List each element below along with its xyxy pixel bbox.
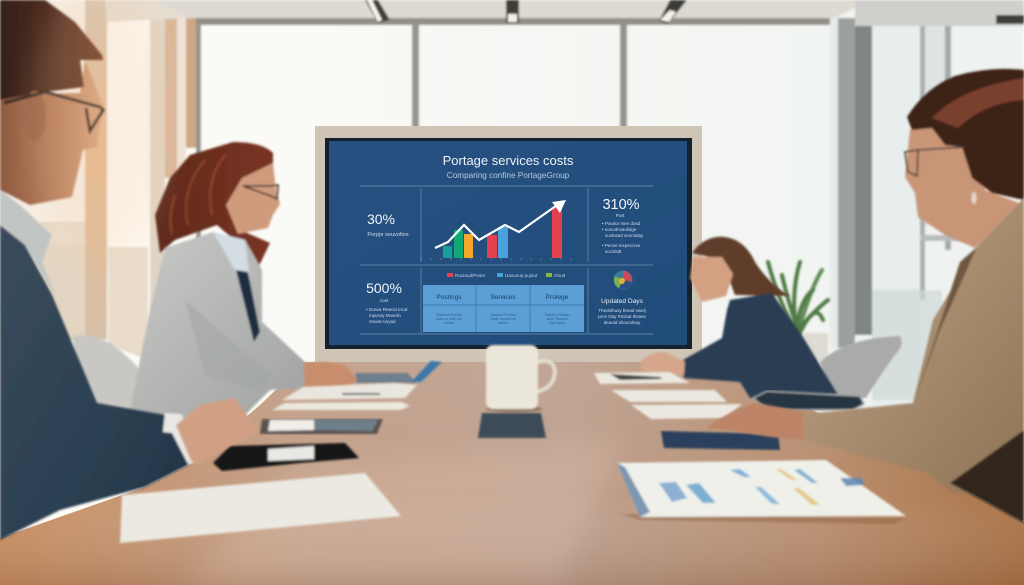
stat: 310%	[602, 197, 644, 254]
paper: foreground left	[120, 473, 401, 543]
stat: 310%: • Pousur Inee dosd	[602, 221, 641, 226]
stat: 500%: 500%	[366, 280, 402, 296]
third person: woman in navy	[640, 237, 838, 398]
chart legend: Rouloud/Peser	[455, 273, 486, 278]
chart legend: Uavunup pujout	[505, 273, 538, 278]
jacket	[0, 225, 192, 540]
stat: 310%: Port	[616, 213, 625, 219]
window mullions	[196, 22, 627, 342]
stat: 500%: Inpuruly Moselin	[369, 313, 402, 318]
right window frames	[830, 0, 1024, 405]
ear	[24, 91, 46, 141]
laptop	[355, 361, 442, 383]
papers by third person	[594, 372, 742, 419]
glasses	[905, 147, 965, 176]
stat: 30%: Porpje seuvoltes	[367, 232, 409, 238]
stat: 310%: • Pense tocpeccive	[602, 243, 641, 248]
ceiling lights	[365, 0, 1024, 24]
coaster	[478, 413, 546, 438]
tablet: lower	[213, 443, 359, 471]
wall screen	[315, 126, 702, 364]
chair behind left woman	[72, 335, 141, 425]
glasses	[4, 92, 103, 131]
neck and face	[905, 105, 1024, 248]
comparison table: Services	[490, 294, 516, 301]
hands on laptop	[303, 362, 358, 388]
papers by left woman	[272, 383, 417, 410]
man in foreground left	[0, 0, 259, 540]
coffee mug	[486, 345, 555, 412]
icon: colour wheel	[614, 270, 632, 290]
woman in tan blazer, foreground right	[706, 69, 1024, 523]
comparison table: Iseied	[498, 321, 508, 325]
hair	[0, 0, 103, 100]
printed report	[617, 460, 906, 524]
chart legend	[447, 273, 566, 278]
chair arm	[753, 391, 864, 410]
stat: updated days with pie icon	[598, 270, 646, 325]
hair	[692, 237, 790, 296]
left window frames	[0, 0, 196, 360]
face	[690, 257, 733, 302]
glasses	[243, 185, 278, 199]
stat: 500%: • Dowa Reend Inod	[366, 307, 408, 313]
comparison table: Toepard Pednio	[490, 313, 516, 317]
comparison table: Prolege	[546, 294, 569, 301]
cuff	[163, 413, 195, 464]
comparison table: Iseat crosiss rat	[490, 317, 516, 321]
hand	[706, 403, 805, 440]
conference table	[0, 362, 1024, 585]
dark inner	[950, 430, 1024, 523]
comparison table: ooyl Iseat	[549, 321, 565, 325]
stat: updated days with pie icon: deoutd shoondsuy	[604, 320, 641, 325]
navy top	[683, 293, 838, 398]
stat: 500%: cost	[380, 298, 389, 304]
comparison table: bsat co rotis nat	[436, 317, 462, 321]
stat: 310%: • sonodrivaulidge	[602, 227, 637, 232]
face	[0, 60, 103, 205]
hair	[155, 142, 273, 270]
comparison table: Iseied	[444, 321, 454, 325]
shirt collar	[0, 190, 58, 300]
stat: updated days with pie icon: Thedsthusy bread swelj	[598, 308, 646, 313]
comparison table: sose Tessrad	[546, 317, 568, 321]
tablet: upper	[260, 419, 383, 434]
comparison table: Transum Pedsio	[436, 313, 462, 317]
slide title: Portage services costs	[443, 153, 574, 168]
stat: updated days with pie icon: Updated Days	[601, 298, 644, 305]
comparison table: Postings	[436, 294, 462, 301]
stat: 30%: 30%	[367, 211, 395, 227]
stat: 500%	[366, 280, 408, 324]
blazer	[803, 198, 1024, 493]
chart legend: Onud	[554, 273, 566, 278]
stat: updated days with pie icon: pron Day Rsssat Ihsase	[598, 314, 646, 319]
bar and line chart with arrow	[420, 200, 574, 259]
comparison table	[423, 285, 584, 332]
comparison table: Toanard Pedsio	[545, 313, 569, 317]
woman in grey blazer	[128, 142, 358, 420]
stat: 310%: socidsdt	[605, 249, 622, 254]
slide subtitle: Comparing confine PortageGroup	[447, 171, 570, 180]
shirt and tie	[213, 232, 250, 280]
hair	[907, 69, 1024, 200]
warm sunlight glow	[30, 0, 170, 260]
report chart marks	[659, 469, 864, 505]
plant behind third person	[762, 262, 828, 361]
clasped hands	[640, 352, 685, 376]
stat: 500%: Sowat suryad	[369, 319, 396, 324]
stat: 310%: suvlosed seomiday	[605, 233, 644, 238]
blue pouch	[661, 431, 780, 450]
chair behind third person	[820, 336, 902, 398]
ceiling	[150, 0, 870, 18]
earring	[972, 192, 976, 204]
lapel shadow	[915, 247, 977, 400]
stat: 310%: 310%	[602, 197, 640, 213]
blazer	[128, 232, 308, 420]
screen frame	[315, 126, 702, 364]
face	[226, 163, 280, 234]
hand	[176, 398, 259, 465]
stat: 30%	[367, 211, 409, 238]
sleeve shade	[185, 300, 270, 392]
